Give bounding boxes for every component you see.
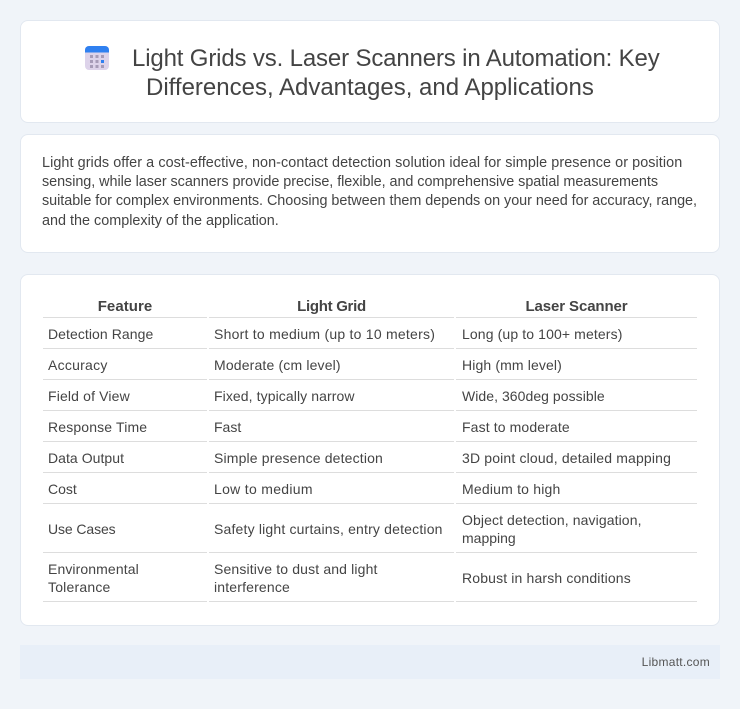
- table: comparison: [43, 298, 697, 602]
- text block: intro paragraph: Light grids offer a cost-effective, non-contact detection solution ideal for simple presence or position: [42, 155, 682, 171]
- panel: intro summary: [20, 134, 720, 253]
- row: field of view: [48, 388, 605, 404]
- row: response time: Fast: [214, 419, 241, 435]
- text block: intro paragraph: and the complexity of the application.: [42, 213, 279, 229]
- row: cost: Cost: [48, 481, 77, 497]
- footer text: Libmatt.com: [642, 655, 710, 669]
- row: accuracy: [48, 357, 562, 373]
- row: use cases: [48, 512, 642, 546]
- row: environmental tolerance: Robust in harsh conditions: [462, 570, 631, 586]
- row: environmental tolerance: Sensitive to dust and light: [214, 561, 378, 577]
- text block: intro paragraph: [42, 155, 697, 229]
- table header: Light Grid: [297, 298, 366, 315]
- row: detection range: Detection Range: [48, 326, 153, 342]
- text block: intro paragraph: suitable for complex environments. Choosing between them depends on your need for accuracy, range,: [42, 193, 697, 209]
- row: detection range: Long (up to 100+ meters): [462, 326, 622, 342]
- row: use cases: Safety light curtains, entry detection: [214, 521, 443, 537]
- table header: [98, 298, 628, 315]
- row: field of view: Wide, 360deg possible: [462, 388, 605, 404]
- title: [132, 45, 660, 101]
- row: field of view: Field of View: [48, 388, 130, 404]
- panel: comparison table: [20, 274, 720, 626]
- row: data output: 3D point cloud, detailed mapping: [462, 450, 671, 466]
- row: field of view: Fixed, typically narrow: [214, 388, 355, 404]
- text block: intro paragraph: sensing, while laser scanners provide precise, flexible, and comprehensive spatial measurements: [42, 174, 658, 190]
- footer bar: [20, 645, 720, 679]
- row: use cases: mapping: [462, 530, 516, 546]
- row: response time: Fast to moderate: [462, 419, 570, 435]
- row: detection range: Short to medium (up to 10 meters): [214, 326, 435, 342]
- row: cost: Medium to high: [462, 481, 561, 497]
- panel: title card: [20, 20, 720, 123]
- row: environmental tolerance: Environmental: [48, 561, 139, 577]
- row: data output: [48, 450, 671, 466]
- icon: calendar grid: [85, 46, 109, 70]
- row: data output: Simple presence detection: [214, 450, 383, 466]
- row: accuracy: Accuracy: [48, 357, 108, 373]
- row: cost: [48, 481, 561, 497]
- row: response time: [48, 419, 570, 435]
- row: environmental tolerance: Tolerance: [48, 579, 111, 595]
- row: environmental tolerance: [48, 561, 631, 595]
- table header: Feature: [98, 298, 152, 315]
- row: data output: Data Output: [48, 450, 124, 466]
- row: detection range: [48, 326, 622, 342]
- row: accuracy: High (mm level): [462, 357, 562, 373]
- row: accuracy: Moderate (cm level): [214, 357, 341, 373]
- row: use cases: Object detection, navigation,: [462, 512, 642, 528]
- title: Light Grids vs. Laser Scanners in Automation: Key: [132, 45, 660, 72]
- row: environmental tolerance: interference: [214, 579, 290, 595]
- title: Differences, Advantages, and Applications: [146, 74, 594, 101]
- row: use cases: Use Cases: [48, 521, 116, 537]
- row: response time: Response Time: [48, 419, 147, 435]
- table header: Laser Scanner: [525, 298, 628, 315]
- row: cost: Low to medium: [214, 481, 313, 497]
